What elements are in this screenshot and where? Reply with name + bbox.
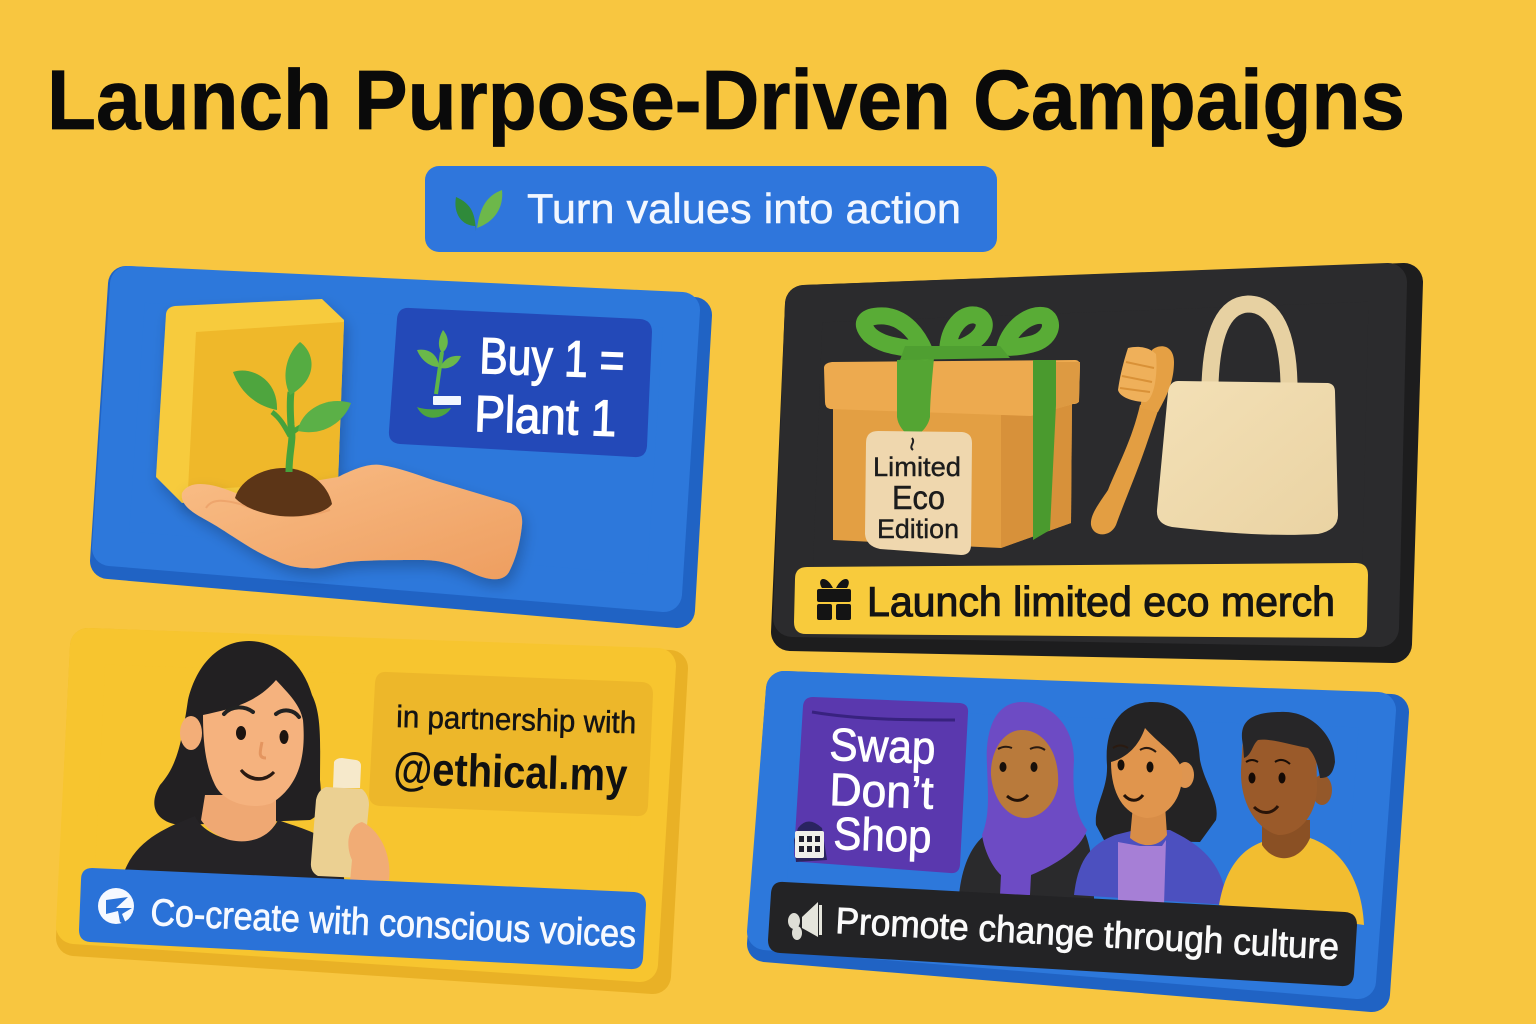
- tag: limited eco edition: Eco: [892, 479, 945, 516]
- icon: gift box: [824, 315, 1080, 555]
- icon: yellow box: [156, 299, 344, 503]
- poster: swap don't shop: Don’t: [829, 763, 935, 819]
- icon: seedling: [455, 190, 502, 231]
- icon: sprout in hand: [182, 342, 522, 579]
- tag: limited eco edition: Edition: [877, 514, 959, 544]
- icon: megaphone: [788, 902, 822, 940]
- icon: bamboo toothbrush: [1091, 346, 1174, 534]
- subtitle banner: [425, 166, 997, 252]
- banner: promote change: [768, 882, 1357, 986]
- banner text: Launch limited eco merch: [867, 578, 1335, 625]
- figure: woman in hijab: [959, 702, 1094, 900]
- title: Launch Purpose-Driven Campaigns: [47, 53, 1405, 147]
- badge: partnership: in partnership with: [396, 699, 637, 740]
- tag: limited eco edition: Limited: [873, 452, 961, 482]
- panel: promote change: [765, 689, 1391, 994]
- icon: tote bag: [1157, 304, 1338, 535]
- figure: woman in cardigan: [1074, 702, 1228, 905]
- panel: buy one plant one: [108, 284, 694, 610]
- banner: co-create: [79, 868, 646, 969]
- panel: eco merch: [790, 282, 1404, 644]
- illustration: woman with bottle: [123, 641, 389, 885]
- icon: gift: [817, 579, 851, 620]
- icon: plant equals: [417, 330, 461, 418]
- poster: swap don't shop: [794, 697, 968, 873]
- badge: buy 1 plant 1: Plant 1: [474, 385, 618, 447]
- panel: co-create: [74, 641, 670, 976]
- tag: limited eco edition: [865, 431, 972, 555]
- badge: buy 1 plant 1: [389, 308, 652, 457]
- banner: launch limited eco merch: [794, 563, 1368, 638]
- subtitle text: Turn values into action: [527, 185, 961, 232]
- poster: swap don't shop: Shop: [833, 807, 932, 862]
- banner text: Promote change through culture: [835, 900, 1340, 967]
- badge text: Buy 1 =: [479, 327, 626, 389]
- badge: partnership: @ethical.my: [393, 742, 628, 801]
- figure: man in yellow shirt: [1219, 712, 1364, 925]
- banner text: Co-create with conscious voices: [150, 892, 637, 956]
- poster: swap don't shop: Swap: [829, 718, 936, 774]
- icon: calendar: [794, 822, 827, 862]
- icon: recycle arrows: [98, 888, 134, 926]
- badge: partnership: [369, 672, 653, 816]
